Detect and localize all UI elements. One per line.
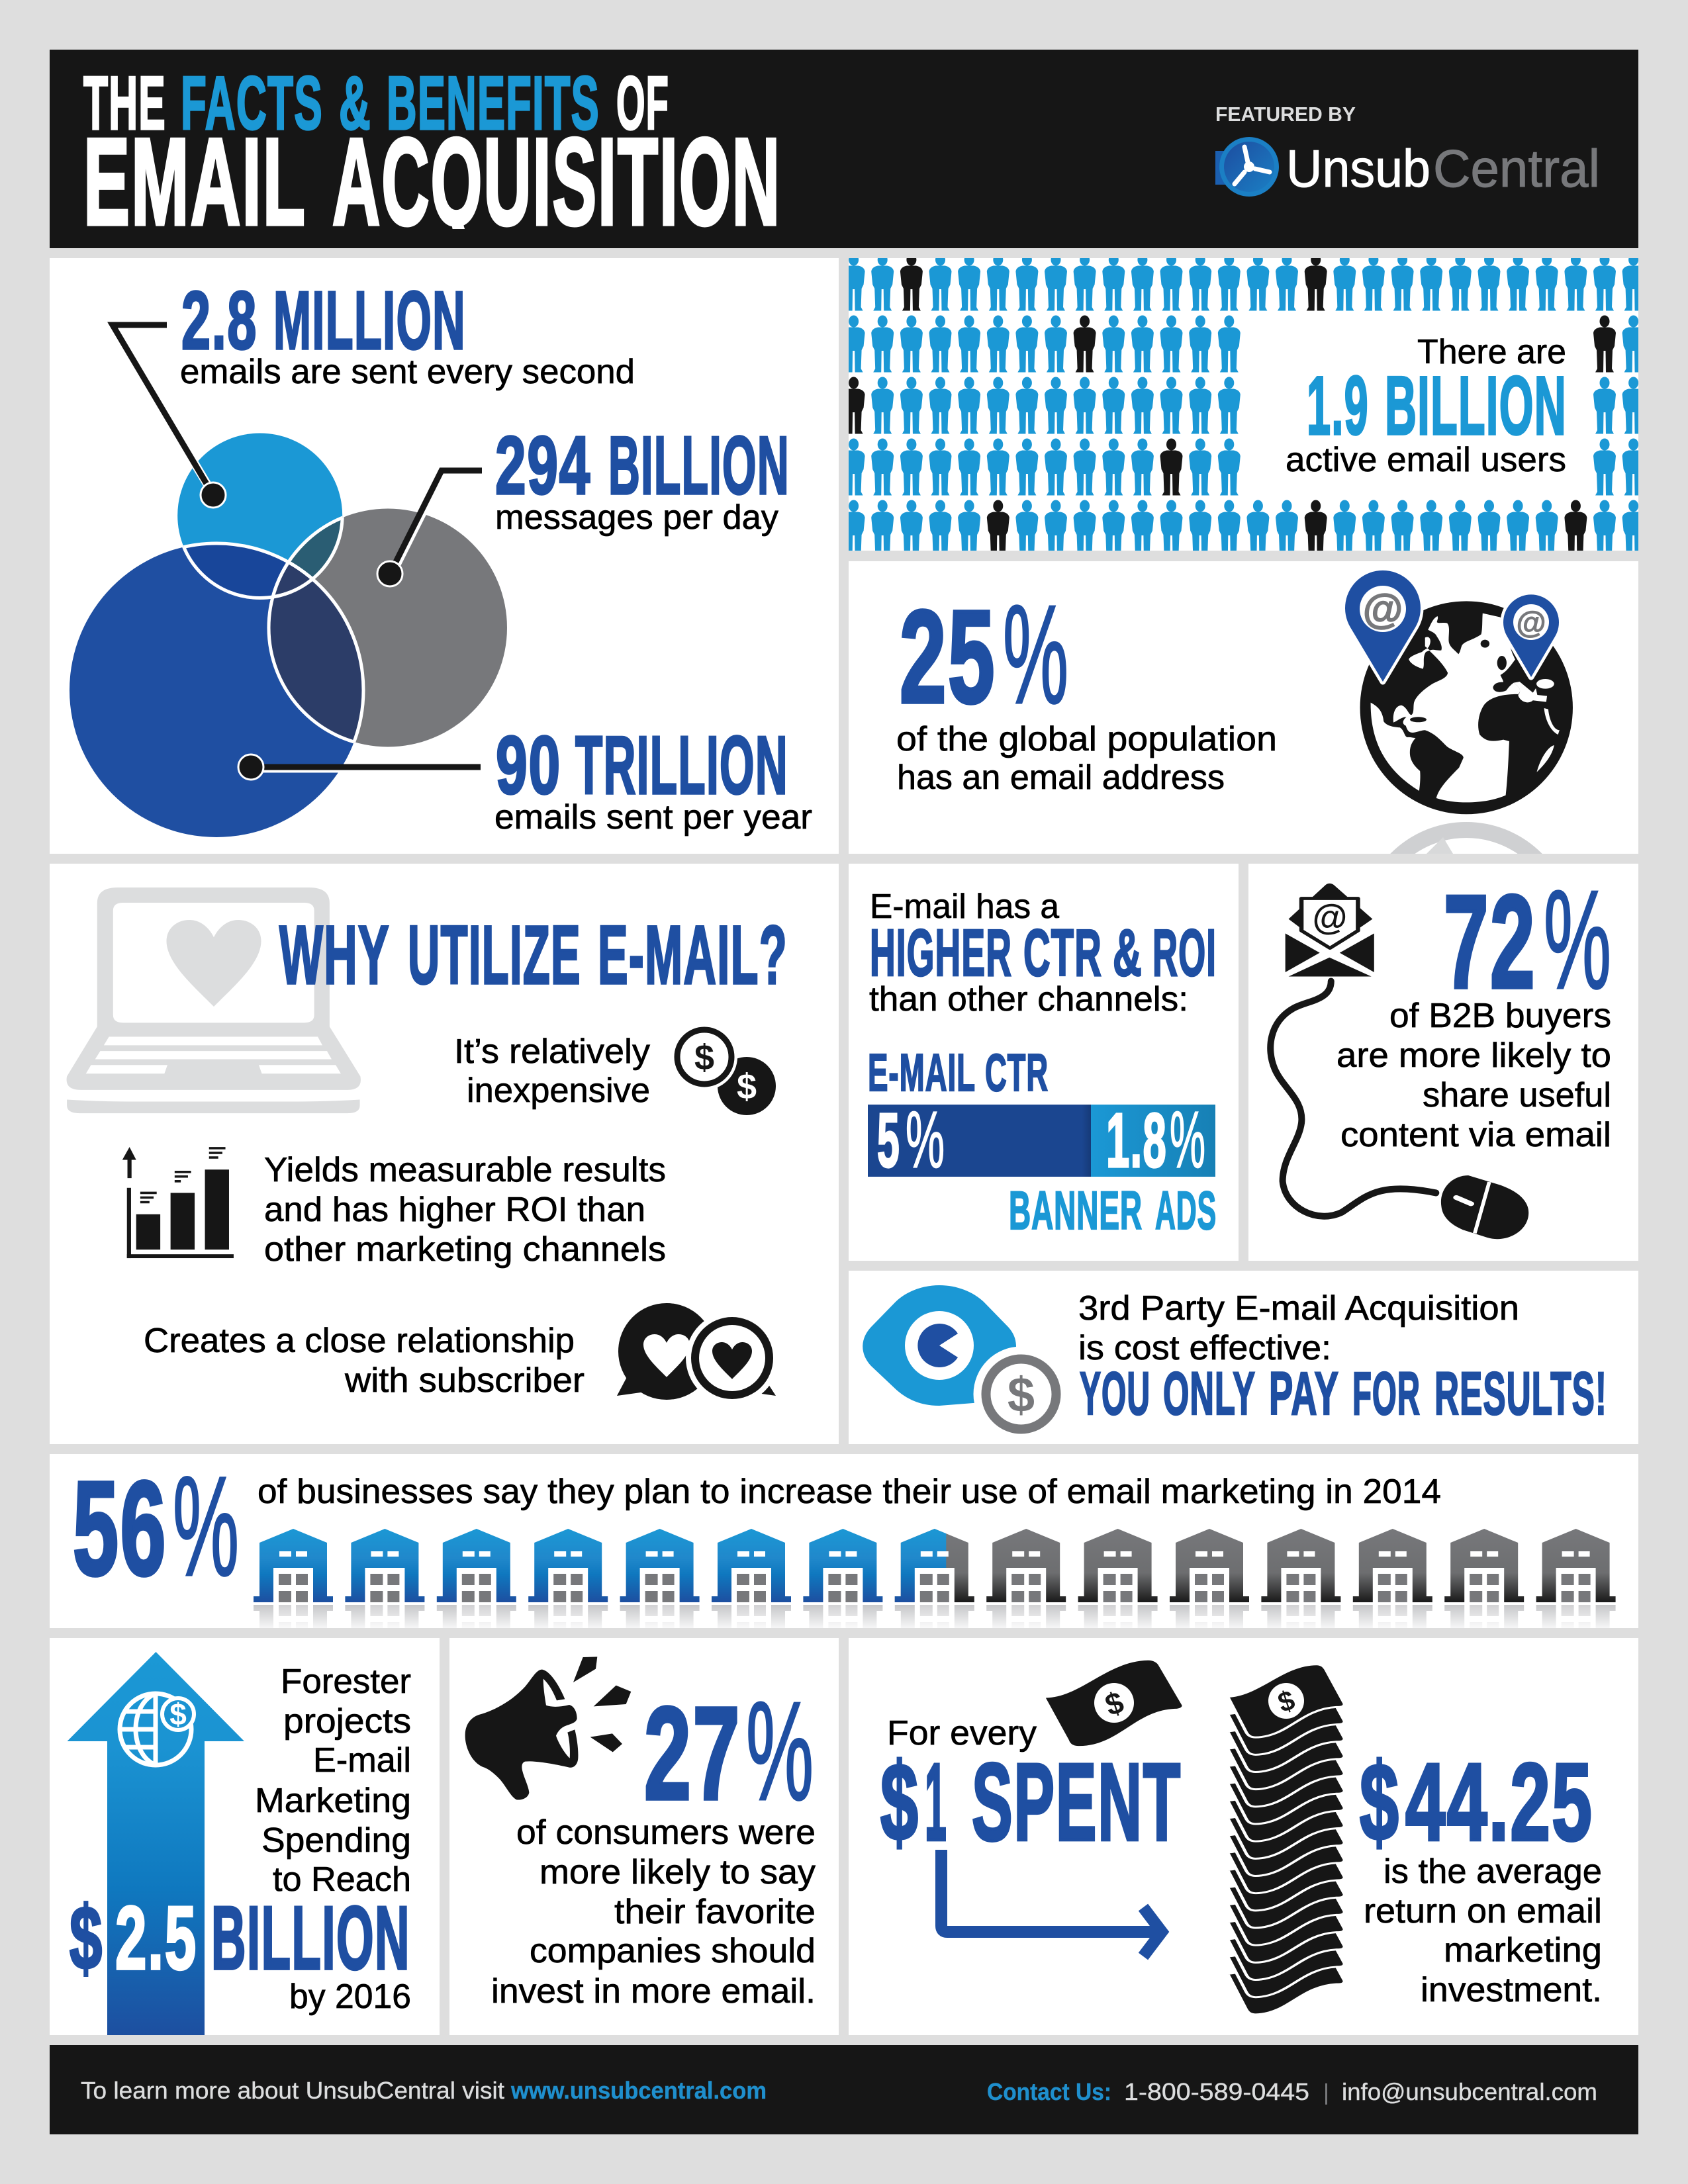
panel: email volume venn <box>50 258 839 854</box>
logo icon <box>1215 137 1279 197</box>
icon: mouse cable <box>1270 981 1436 1216</box>
stat: 27 percent: % <box>746 1672 814 1829</box>
panel: higher CTR and ROI <box>849 864 1239 1261</box>
heading: WHY <box>279 909 390 1001</box>
stat: 2.8 million: 2.8 <box>181 275 258 367</box>
b2b caption: share useful <box>1423 1076 1611 1115</box>
consumers caption: their favorite <box>614 1893 816 1931</box>
label: email ctr: E-MAIL <box>868 1043 976 1102</box>
forester text: projects <box>283 1702 411 1741</box>
icon: coins: $ <box>694 1038 714 1077</box>
bar chart: ctr comparison: % <box>906 1095 945 1185</box>
panel: global population <box>849 561 1638 854</box>
forester text: Forester <box>281 1662 411 1701</box>
consumers caption: more likely to say <box>539 1853 816 1891</box>
panel: b2b buyers <box>1248 861 1638 1261</box>
panel: business plans <box>50 1454 1638 1628</box>
stat: 294 billion: messages per day <box>495 498 778 537</box>
stat: 1.9 billion <box>1286 333 1567 479</box>
icon: small location pin: @ <box>1517 605 1546 639</box>
icon: laptop with heart <box>67 887 361 1113</box>
icon: computer mouse <box>1441 1175 1528 1239</box>
title line 2: ACQUISITION <box>332 113 781 251</box>
intro text: HIGHER <box>870 916 1012 990</box>
stat: 27 percent: 27 <box>644 1680 741 1827</box>
icon: eye with coin: $ <box>1008 1367 1035 1422</box>
leader line: 90 trillion <box>238 754 481 780</box>
stat: 1 dollar spent: SPENT <box>972 1741 1182 1864</box>
stat: 1.9 billion: 1.9 <box>1307 360 1369 452</box>
return caption: is the average <box>1383 1852 1602 1891</box>
venn diagram circles <box>70 433 507 837</box>
label: banner ads: ADS <box>1155 1181 1217 1241</box>
return caption: marketing <box>1444 1931 1602 1970</box>
stat: 2.8 million: emails are sent every second <box>180 353 635 391</box>
stat: 1.9 billion: There are <box>1417 333 1566 371</box>
icon: large location pin <box>1345 570 1421 682</box>
icon: single dollar bill: $ <box>1101 1684 1128 1723</box>
bar chart: ctr comparison: % <box>1170 1095 1205 1185</box>
stat: 90 trillion: 90 <box>496 720 561 811</box>
third party text: ONLY <box>1163 1360 1256 1428</box>
icon: rising arrow <box>68 1652 244 2035</box>
forester text: Marketing <box>255 1782 411 1820</box>
stat: 2.5 billion: BILLION <box>211 1888 410 1988</box>
icon: heart speech bubbles <box>617 1303 778 1404</box>
panel: active email users <box>843 254 1645 557</box>
header banner <box>50 50 1638 251</box>
icon: open envelope <box>1286 884 1374 976</box>
title line 1 <box>83 62 669 146</box>
reason: inexpensive: inexpensive <box>467 1071 650 1110</box>
reason: close relationship: Creates a close relationship <box>144 1322 575 1360</box>
stat: 72 percent: % <box>1544 861 1611 1018</box>
heading: E-MAIL? <box>598 909 788 1001</box>
title line 1: FACTS <box>181 62 323 146</box>
icon: single dollar bill <box>1046 1661 1182 1746</box>
stat: 294 billion: 294 <box>495 420 591 512</box>
icon: small location pin <box>1503 594 1559 677</box>
panel: why utilize email <box>50 864 839 1444</box>
featured by label: FEATURED BY <box>1215 103 1356 126</box>
icon: stack of bills: $ <box>1274 1684 1299 1718</box>
reason: measurable results: other marketing channels <box>264 1230 666 1269</box>
intro text <box>869 887 1217 1019</box>
intro text: E-mail has a <box>870 887 1059 926</box>
bar chart: ctr comparison: 5 <box>877 1097 900 1183</box>
stat: 25 percent: 25 <box>900 584 996 731</box>
header banner: OF <box>616 62 669 146</box>
stat: 56 percent: 56 <box>73 1453 167 1603</box>
stat: 2.8 million <box>180 275 635 391</box>
footer learn more: To learn more about UnsubCentral visit <box>81 2077 504 2104</box>
heading: UTILIZE <box>408 909 581 1001</box>
b2b caption <box>1336 997 1611 1154</box>
logo wordmark <box>1286 139 1600 198</box>
stat: 44.25 dollars: $ <box>1360 1741 1400 1864</box>
global population caption: has an email address <box>897 758 1225 797</box>
reason: close relationship <box>144 1322 585 1400</box>
panel: third party acquisition <box>849 1271 1638 1444</box>
stat: 1 dollar spent: 1 <box>925 1741 947 1864</box>
stat: 44.25 dollars <box>1360 1741 1593 1864</box>
footer contact <box>987 2078 1597 2105</box>
consumers caption: of consumers were <box>516 1813 816 1852</box>
stat: 90 trillion <box>494 720 812 837</box>
consumers caption: companies should <box>530 1932 816 1970</box>
footer learn more <box>81 2077 767 2104</box>
icon: megaphone <box>465 1657 631 1800</box>
title line 1: & <box>339 62 371 146</box>
footer learn more: www.unsubcentral.com <box>510 2077 767 2104</box>
reason: inexpensive: It’s relatively <box>454 1032 650 1071</box>
icon: coins <box>671 1024 776 1115</box>
return caption: investment. <box>1421 1971 1602 2009</box>
stat: 2.5 billion <box>70 1888 410 1988</box>
stat: 294 billion: BILLION <box>608 420 790 512</box>
business plans caption: of businesses say they plan to increase their use of email marketing in 2014 <box>258 1473 1441 1511</box>
reason: inexpensive <box>454 1032 650 1110</box>
reason: measurable results: and has higher ROI than <box>264 1191 645 1229</box>
icon: globe with dollar: $ <box>169 1697 187 1731</box>
consumers caption <box>491 1813 816 2011</box>
footer banner <box>50 2045 1638 2134</box>
forester text: E-mail <box>313 1741 411 1780</box>
stat: 56 percent: % <box>173 1447 239 1606</box>
third party text <box>1078 1289 1607 1428</box>
third party text: FOR <box>1352 1360 1421 1428</box>
for every text: For every <box>887 1714 1037 1752</box>
consumers caption: invest in more email. <box>491 1972 816 2011</box>
logo wordmark: Unsub <box>1286 139 1430 198</box>
stat: 294 billion <box>495 420 790 537</box>
reason: close relationship: with subscriber <box>344 1361 585 1400</box>
icon: large location pin: @ <box>1363 586 1403 632</box>
panel: favorite companies <box>449 1638 839 2035</box>
icon: coins: $ <box>737 1067 757 1107</box>
forester text <box>255 1662 411 1899</box>
stat: 1.9 billion: active email users <box>1286 441 1566 479</box>
title line 2: EMAIL <box>83 113 306 251</box>
stat: 2.5 billion: $ <box>70 1888 103 1988</box>
title line 2 <box>87 136 776 229</box>
intro text: ROI <box>1152 916 1217 990</box>
b2b caption: of B2B buyers <box>1389 997 1611 1035</box>
icon: stack of bills <box>1228 1664 1344 2015</box>
logo wordmark: Central <box>1433 139 1600 198</box>
footer contact: info@unsubcentral.com <box>1342 2078 1597 2105</box>
return caption <box>1364 1852 1602 2009</box>
third party text: PAY <box>1269 1360 1339 1428</box>
title line 1: BENEFITS <box>387 62 600 146</box>
bar chart: ctr comparison <box>868 1095 1215 1185</box>
stat: 2.5 billion: 2.5 <box>115 1888 197 1988</box>
third party text: 3rd Party E-mail Acquisition <box>1078 1289 1519 1328</box>
b2b caption: content via email <box>1340 1116 1611 1154</box>
panel: forester projection <box>50 1638 440 2035</box>
third party text: YOU <box>1080 1360 1150 1428</box>
global population caption <box>896 720 1277 797</box>
stat: 90 trillion: emails sent per year <box>494 798 812 837</box>
intro text: & <box>1113 916 1143 990</box>
forester text: Spending <box>261 1821 411 1860</box>
label: email ctr: CTR <box>985 1043 1049 1102</box>
icon: globe <box>1360 601 1573 814</box>
panel: return on investment <box>849 1638 1638 2035</box>
pictogram: gray houses <box>986 1529 1616 1602</box>
icon: globe reflection <box>1390 822 1542 854</box>
stat: 2.8 million: MILLION <box>273 275 466 367</box>
intro text: CTR <box>1023 916 1102 990</box>
by 2016: by 2016 <box>289 1978 411 2016</box>
people pictogram grid <box>843 254 1645 557</box>
stat: 44.25 dollars: 44.25 <box>1405 1741 1593 1864</box>
houses reflection <box>254 1605 1616 1628</box>
stat: 72 percent: 72 <box>1444 868 1536 1016</box>
label: banner ads: BANNER <box>1009 1181 1143 1241</box>
reason: measurable results: Yields measurable results <box>264 1151 666 1189</box>
icon: open envelope: @ <box>1313 897 1347 937</box>
leader line: 294 billion <box>377 471 483 586</box>
footer contact: Contact Us: <box>987 2078 1111 2105</box>
icon: globe with dollar <box>120 1694 194 1765</box>
icon: eye with coin <box>863 1285 1068 1441</box>
arrow: spend to return <box>941 1850 1162 1956</box>
stat: 1 dollar spent <box>880 1741 1182 1864</box>
stat: 1 dollar spent: $ <box>880 1741 919 1864</box>
heading <box>279 909 788 1001</box>
stat: 25 percent: % <box>1003 576 1068 733</box>
third party text: is cost effective: <box>1078 1329 1331 1367</box>
bar chart: ctr comparison: 1.8 <box>1106 1097 1167 1183</box>
icon: bar chart <box>122 1147 234 1258</box>
title line 1: THE <box>83 62 166 146</box>
global population caption: of the global population <box>896 720 1277 758</box>
return caption: return on email <box>1364 1892 1602 1931</box>
footer contact: 1-800-589-0445 <box>1124 2078 1309 2105</box>
pictogram: blue houses <box>254 1529 974 1602</box>
intro text: than other channels: <box>869 980 1188 1019</box>
b2b caption: are more likely to <box>1336 1036 1611 1075</box>
leader line: 2.8 million <box>112 325 226 508</box>
reason: measurable results <box>264 1151 666 1269</box>
stat: 90 trillion: TRILLION <box>575 720 788 811</box>
forester text: to Reach <box>273 1860 411 1899</box>
